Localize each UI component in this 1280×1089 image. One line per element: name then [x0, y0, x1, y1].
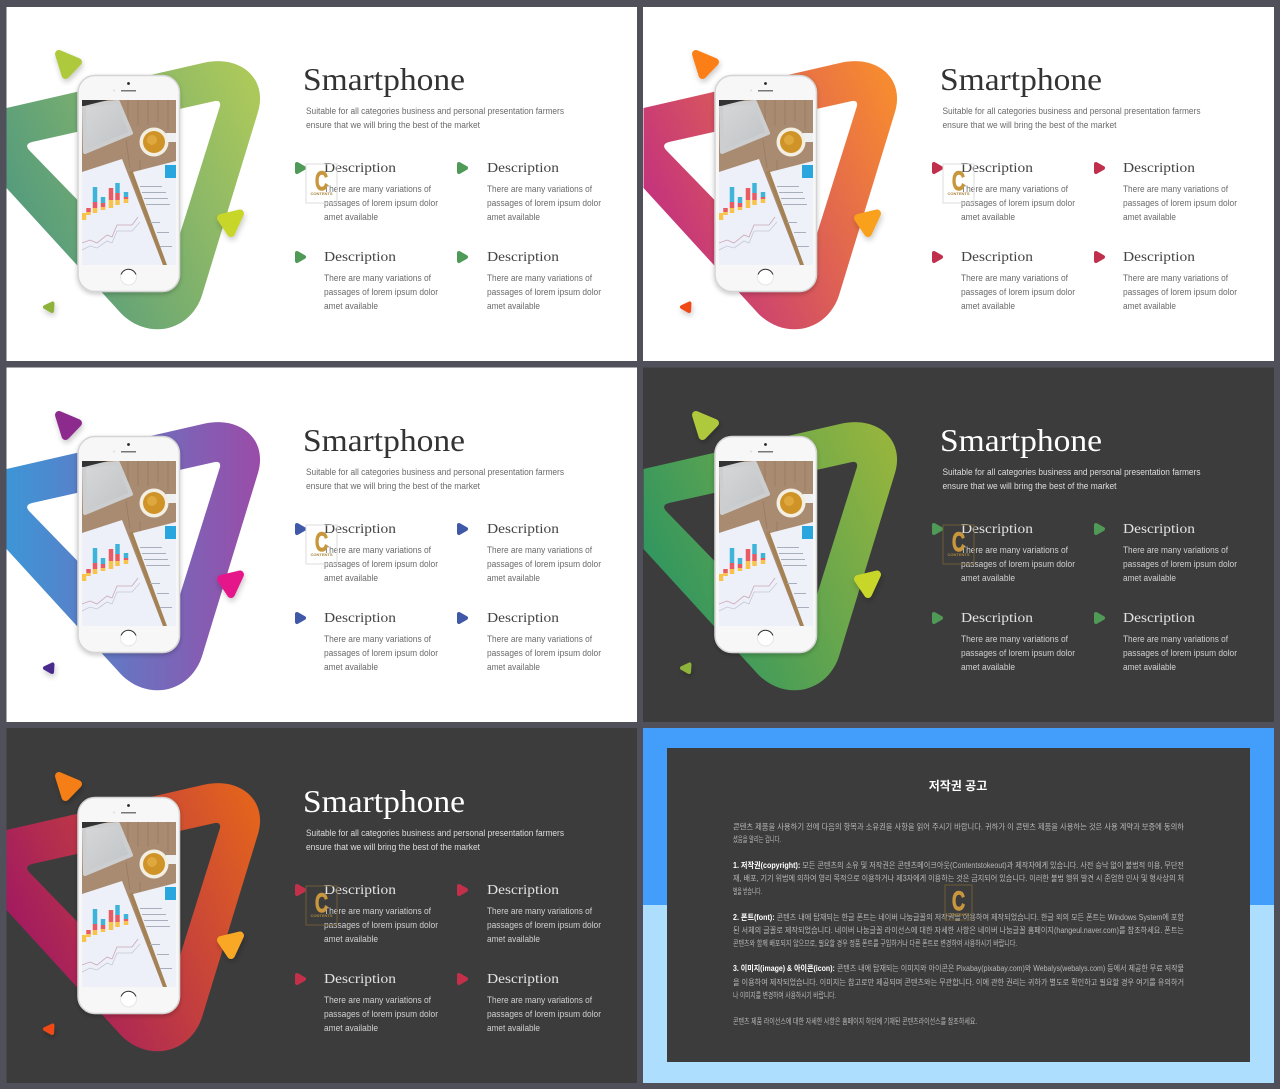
item 2: There are many variations of	[1123, 184, 1228, 194]
triangle ring	[6, 783, 260, 1051]
item 2	[459, 161, 601, 222]
item 2: passages of lorem ipsum dolor	[1123, 198, 1237, 208]
item 4: Description	[487, 250, 559, 265]
item 2: amet available	[487, 934, 540, 944]
watermark logo: CONTENTS	[310, 913, 333, 918]
triangle ring	[644, 422, 897, 690]
watermark logo	[943, 164, 974, 203]
phone mockup	[715, 76, 816, 292]
item 1: Description	[961, 161, 1033, 176]
image paragraph	[733, 963, 1184, 1000]
item 4: passages of lorem ipsum dolor	[487, 287, 601, 297]
watermark logo: CONTENTS	[310, 552, 333, 557]
item 1: There are many variations of	[324, 184, 431, 194]
item 2: There are many variations of	[487, 906, 592, 916]
font paragraph: 2. 폰트(font): 콘텐츠 내에 탑재되는 한글 폰트는 네이버 나눔글꼴의 저작권을 이용하여 제작되었습니다. 한글 외의 모든 폰트는 Windows System에 포함	[733, 912, 1185, 922]
copyright paragraph	[733, 860, 1184, 896]
panel: green dark slide	[643, 368, 1274, 722]
subtitle	[306, 828, 564, 852]
small triangle right	[221, 574, 240, 594]
intro paragraph: 콘텐츠 제품을 사용하기 전에 다음의 항목과 소유권을 사항을 읽어 주시기 바랍니다. 귀하가 이 콘텐츠 제품을 사용하는 것은 사용 계약과 보증에 동의하	[733, 822, 1185, 832]
font paragraph: 콘텐츠와 함께 배포되지 않으므로, 필요할 경우 정품 폰트를 구입하거나 다른 폰트로 변경하여 사용하시기 바랍니다.	[733, 938, 1017, 948]
item 1: passages of lorem ipsum dolor	[324, 920, 438, 930]
watermark logo	[945, 885, 972, 920]
item 3	[934, 611, 1075, 672]
subtitle: Suitable for all categories business and personal presentation farmers	[306, 106, 564, 116]
phone mockup	[715, 436, 816, 652]
watermark logo: C	[952, 527, 965, 557]
license paragraph: 콘텐츠 제품 라이선스에 대한 자세한 사항은 홈페이지 하단에 기재된 콘텐츠라이선스를 참조하세요.	[733, 1016, 977, 1026]
image paragraph: 3. 이미지(image) & 아이콘(icon): 콘텐츠 내에 탑재되는 이미지와 아이콘은 Pixabay(pixabay.com)와 Webalys(webalys.com) 등에서 제공한 무료 저작물	[733, 963, 1184, 973]
item 2: passages of lorem ipsum dolor	[487, 559, 601, 569]
subtitle: ensure that we will bring the best of the market	[942, 481, 1117, 491]
font paragraph	[733, 912, 1185, 948]
phone mockup	[78, 436, 180, 652]
phone mockup	[78, 76, 180, 292]
item 3: Description	[961, 611, 1033, 626]
watermark logo	[306, 525, 337, 564]
item 4: amet available	[1123, 301, 1176, 311]
item 4: passages of lorem ipsum dolor	[487, 648, 601, 658]
watermark logo	[943, 525, 974, 564]
item 1: passages of lorem ipsum dolor	[324, 198, 438, 208]
font paragraph: 된 서체의 글꼴로 제작되었습니다. 네이버 나눔글꼴 라이선스에 대한 자세한 사항은 네이버 나눔글꼴 홈페이지(hangeul.naver.com)를 참조하세요. 폰트는	[733, 925, 1184, 935]
item 2: amet available	[487, 212, 540, 222]
item 3: passages of lorem ipsum dolor	[961, 648, 1075, 658]
item 4: Description	[1123, 611, 1195, 626]
item 1: Description	[324, 883, 396, 898]
phone mockup	[78, 798, 180, 1014]
item 1	[297, 522, 438, 583]
watermark logo: CONTENTS	[948, 552, 970, 557]
intro paragraph	[733, 822, 1185, 844]
subtitle	[306, 467, 564, 491]
small triangle bottom	[682, 304, 690, 311]
item 2	[459, 883, 601, 944]
item 3: Description	[324, 972, 396, 987]
item 2: amet available	[1123, 573, 1176, 583]
item 1: Description	[324, 161, 396, 176]
item 4	[459, 611, 601, 672]
subtitle: ensure that we will bring the best of the market	[306, 120, 480, 130]
item 1	[934, 522, 1075, 583]
watermark logo	[306, 164, 337, 203]
item 4: There are many variations of	[487, 634, 592, 644]
item 4: amet available	[487, 301, 540, 311]
item 1: Description	[961, 522, 1033, 537]
item 1: amet available	[324, 212, 378, 222]
item 3: Description	[324, 250, 396, 265]
item 3: passages of lorem ipsum dolor	[324, 648, 438, 658]
small triangle top	[59, 54, 78, 75]
title: Smartphone	[303, 422, 465, 458]
item 4: There are many variations of	[487, 995, 592, 1005]
watermark logo: C	[315, 527, 328, 557]
notice heading: 저작권 공고	[929, 778, 987, 793]
item 3: amet available	[961, 301, 1015, 311]
item 4: passages of lorem ipsum dolor	[1123, 648, 1237, 658]
subtitle: Suitable for all categories business and personal presentation farmers	[306, 467, 564, 477]
watermark logo	[306, 886, 337, 925]
item 1: There are many variations of	[324, 906, 431, 916]
watermark logo: CONTENTS	[948, 191, 970, 196]
subtitle: Suitable for all categories business and personal presentation farmers	[942, 467, 1201, 477]
item 3: passages of lorem ipsum dolor	[324, 1009, 438, 1019]
item 3: passages of lorem ipsum dolor	[324, 287, 438, 297]
item 2: passages of lorem ipsum dolor	[487, 198, 601, 208]
item 2: Description	[487, 883, 559, 898]
item 4: Description	[487, 972, 559, 987]
item 1: amet available	[961, 212, 1015, 222]
panel: orange light slide	[643, 7, 1274, 361]
small triangle top	[59, 415, 78, 436]
item 3: amet available	[961, 662, 1015, 672]
item 4: Description	[487, 611, 559, 626]
item 4	[459, 250, 601, 311]
watermark logo: C	[952, 886, 965, 916]
item 3	[297, 250, 438, 311]
image paragraph: 을 이용하여 제작되었습니다. 이미지는 참고로만 제공되며 콘텐츠와는 무관합니다. 이에 관한 권리는 귀하가 별도로 확인하고 필요할 경우 여기를 유의하거	[733, 977, 1184, 987]
subtitle: ensure that we will bring the best of the market	[306, 842, 480, 852]
item 4: Description	[1123, 250, 1195, 265]
item 4: amet available	[487, 1023, 540, 1033]
item 3: There are many variations of	[324, 634, 431, 644]
small triangle top	[696, 415, 715, 436]
subtitle	[942, 467, 1201, 491]
item 3: amet available	[324, 1023, 378, 1033]
item 2: Description	[487, 522, 559, 537]
item 3: Description	[961, 250, 1033, 265]
item 2: There are many variations of	[487, 184, 592, 194]
item 1: amet available	[324, 573, 378, 583]
subtitle: Suitable for all categories business and personal presentation farmers	[306, 828, 564, 838]
item 1: There are many variations of	[961, 545, 1068, 555]
item 1	[297, 883, 438, 944]
subtitle: ensure that we will bring the best of the market	[306, 481, 480, 491]
small triangle right	[221, 936, 240, 955]
item 2: Description	[1123, 522, 1195, 537]
item 1: passages of lorem ipsum dolor	[324, 559, 438, 569]
item 4: There are many variations of	[1123, 273, 1228, 283]
item 3	[297, 611, 438, 672]
item 2: There are many variations of	[487, 545, 592, 555]
item 2: Description	[1123, 161, 1195, 176]
item 2	[1096, 161, 1237, 222]
item 4	[459, 972, 601, 1033]
watermark logo: C	[315, 166, 328, 196]
item 3	[934, 250, 1075, 311]
item 2: amet available	[1123, 212, 1176, 222]
subtitle	[942, 106, 1201, 130]
item 3: There are many variations of	[324, 995, 431, 1005]
triangle ring	[6, 422, 260, 690]
small triangle right	[858, 214, 877, 233]
item 3: amet available	[324, 662, 378, 672]
item 4: passages of lorem ipsum dolor	[1123, 287, 1237, 297]
item 4: amet available	[487, 662, 540, 672]
panel: green light slide	[6, 7, 637, 361]
item 3: Description	[324, 611, 396, 626]
small triangle right	[858, 574, 877, 594]
small triangle bottom	[45, 304, 52, 311]
item 1: There are many variations of	[961, 184, 1068, 194]
item 1: amet available	[961, 573, 1015, 583]
small triangle bottom	[682, 664, 690, 672]
subtitle: Suitable for all categories business and personal presentation farmers	[942, 106, 1201, 116]
title: Smartphone	[940, 422, 1102, 458]
copyright paragraph: 재, 배포, 기기 위법에 의하여 영리 목적으로 이용하거나 제3자에게 이용하는 것은 금지되어 있습니다. 이러한 불법 행위 발견 시 준엄한 민사 및 형사상의 처	[733, 873, 1184, 883]
title: Smartphone	[303, 61, 465, 97]
title: Smartphone	[303, 783, 465, 819]
item 3: passages of lorem ipsum dolor	[961, 287, 1075, 297]
item 3: amet available	[324, 301, 378, 311]
item 1: passages of lorem ipsum dolor	[961, 198, 1075, 208]
item 4: passages of lorem ipsum dolor	[487, 1009, 601, 1019]
watermark logo: CONTENTS	[310, 191, 333, 196]
item 1: passages of lorem ipsum dolor	[961, 559, 1075, 569]
item 3: There are many variations of	[961, 634, 1068, 644]
small triangle right	[221, 214, 240, 233]
item 4: There are many variations of	[1123, 634, 1228, 644]
item 4: There are many variations of	[487, 273, 592, 283]
panel: copyright notice	[643, 728, 1274, 1083]
subtitle: ensure that we will bring the best of the market	[942, 120, 1117, 130]
watermark logo: C	[315, 888, 328, 918]
item 4: amet available	[1123, 662, 1176, 672]
small triangle bottom	[45, 1026, 52, 1033]
item 3: There are many variations of	[961, 273, 1068, 283]
panel: purple light slide	[6, 368, 637, 722]
item 2: amet available	[487, 573, 540, 583]
item 2: There are many variations of	[1123, 545, 1228, 555]
small triangle top	[59, 776, 78, 797]
item 1	[297, 161, 438, 222]
item 4	[1096, 250, 1237, 311]
item 4	[1096, 611, 1237, 672]
small triangle top	[696, 54, 715, 75]
intro paragraph: 셨음을 알리는 겁니다.	[733, 834, 781, 844]
item 1: Description	[324, 522, 396, 537]
item 2: passages of lorem ipsum dolor	[487, 920, 601, 930]
watermark logo: C	[952, 166, 965, 196]
triangle ring	[6, 61, 260, 329]
small triangle bottom	[45, 664, 52, 672]
item 2	[459, 522, 601, 583]
triangle ring	[644, 61, 897, 329]
watermark logo: CONTENTS	[948, 912, 970, 917]
item 2: passages of lorem ipsum dolor	[1123, 559, 1237, 569]
copyright paragraph: 벌을 받습니다.	[733, 886, 762, 896]
panel: orange dark slide	[6, 728, 637, 1083]
item 1: amet available	[324, 934, 378, 944]
item 1	[934, 161, 1075, 222]
image paragraph: 나 이미지를 변경하여 사용하시기 바랍니다.	[733, 990, 836, 1000]
item 3	[297, 972, 438, 1033]
item 2: Description	[487, 161, 559, 176]
item 1: There are many variations of	[324, 545, 431, 555]
subtitle	[306, 106, 564, 130]
copyright paragraph: 1. 저작권(copyright): 모든 콘텐츠의 소유 및 저작권은 콘텐츠메이크아웃(Contentstokeout)과 제작자에게 있습니다. 사전 승낙 없이 불법적 이용, 무단전	[733, 860, 1184, 870]
item 2	[1096, 522, 1237, 583]
title: Smartphone	[940, 61, 1102, 97]
item 3: There are many variations of	[324, 273, 431, 283]
